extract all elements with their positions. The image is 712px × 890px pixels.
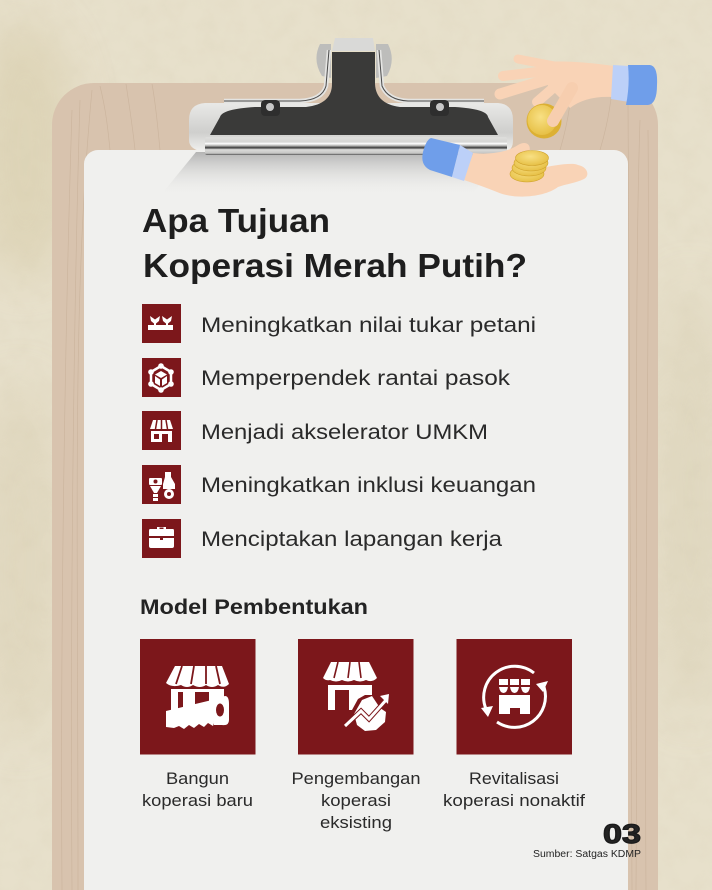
- card label: [292, 770, 420, 832]
- card label: koperasi baru: [142, 792, 253, 810]
- card label: [142, 770, 253, 810]
- screw right: [430, 100, 449, 116]
- clip hinge: [316, 44, 392, 78]
- icon: shop with saw: [166, 666, 229, 729]
- card label: Pengembangan: [292, 770, 420, 788]
- goal 3: MSME accelerator: Menjadi akselerator UMKM: [201, 420, 488, 444]
- wooden clipboard board: [52, 83, 658, 890]
- title: [142, 202, 527, 284]
- goal 3: MSME accelerator: [142, 411, 488, 450]
- icon: shop with growth gear: [323, 662, 386, 731]
- clip base plate: [189, 103, 513, 152]
- illustration: upper hand holding coin: [500, 59, 657, 138]
- goal 5: job creation: Menciptakan lapangan kerja: [201, 527, 502, 551]
- card label: koperasi nonaktif: [443, 792, 585, 810]
- coin stack: [510, 150, 548, 182]
- falling coin: [526, 104, 562, 138]
- card label: Revitalisasi: [469, 770, 559, 788]
- upper hand fingers: [500, 59, 565, 102]
- card: revitalize inactive: [443, 639, 585, 810]
- card: develop existing: [292, 639, 420, 832]
- page number: 03: [603, 819, 641, 849]
- goal 4: financial inclusion: Meningkatkan inklusi keuangan: [201, 473, 536, 497]
- title: Apa Tujuan: [142, 202, 330, 239]
- thumb: [553, 88, 572, 121]
- upper cuff: [611, 65, 629, 102]
- clip dark plate: [210, 52, 498, 135]
- card label: [443, 770, 585, 810]
- goal 2: supply chain: Memperpendek rantai pasok: [201, 366, 510, 390]
- clip shadow on paper: [160, 152, 500, 196]
- card label: Bangun: [166, 770, 229, 788]
- goal 1: farmer exchange rate: Meningkatkan nilai tukar petani: [201, 313, 536, 337]
- goals list: [142, 304, 536, 558]
- screw left: [261, 100, 280, 116]
- card: new cooperative: [140, 639, 256, 810]
- icon: building in cycle arrows: [484, 666, 545, 727]
- paper sheet: [84, 150, 628, 890]
- source note: Sumber: Satgas KDMP: [533, 849, 641, 860]
- lower palm: [464, 143, 587, 197]
- clip roller: [205, 137, 507, 155]
- illustration: lower hand with coins: [422, 138, 587, 197]
- clip top cap: [332, 38, 375, 51]
- lower cuff: [422, 138, 460, 177]
- section heading: Model Pembentukan: Model Pembentukan: [140, 596, 368, 619]
- goal 2: supply chain: [142, 358, 510, 397]
- goal 5: job creation: [142, 519, 502, 558]
- model cards: [140, 639, 585, 832]
- goal 1: farmer exchange rate: [142, 304, 536, 343]
- upper palm: [545, 61, 614, 108]
- card label: eksisting: [320, 814, 392, 832]
- clip wire arms: [224, 50, 484, 101]
- goal 4: financial inclusion: [142, 465, 536, 504]
- metal clipboard clip: [189, 38, 513, 155]
- title: Koperasi Merah Putih?: [143, 247, 527, 284]
- card label: koperasi: [321, 792, 391, 810]
